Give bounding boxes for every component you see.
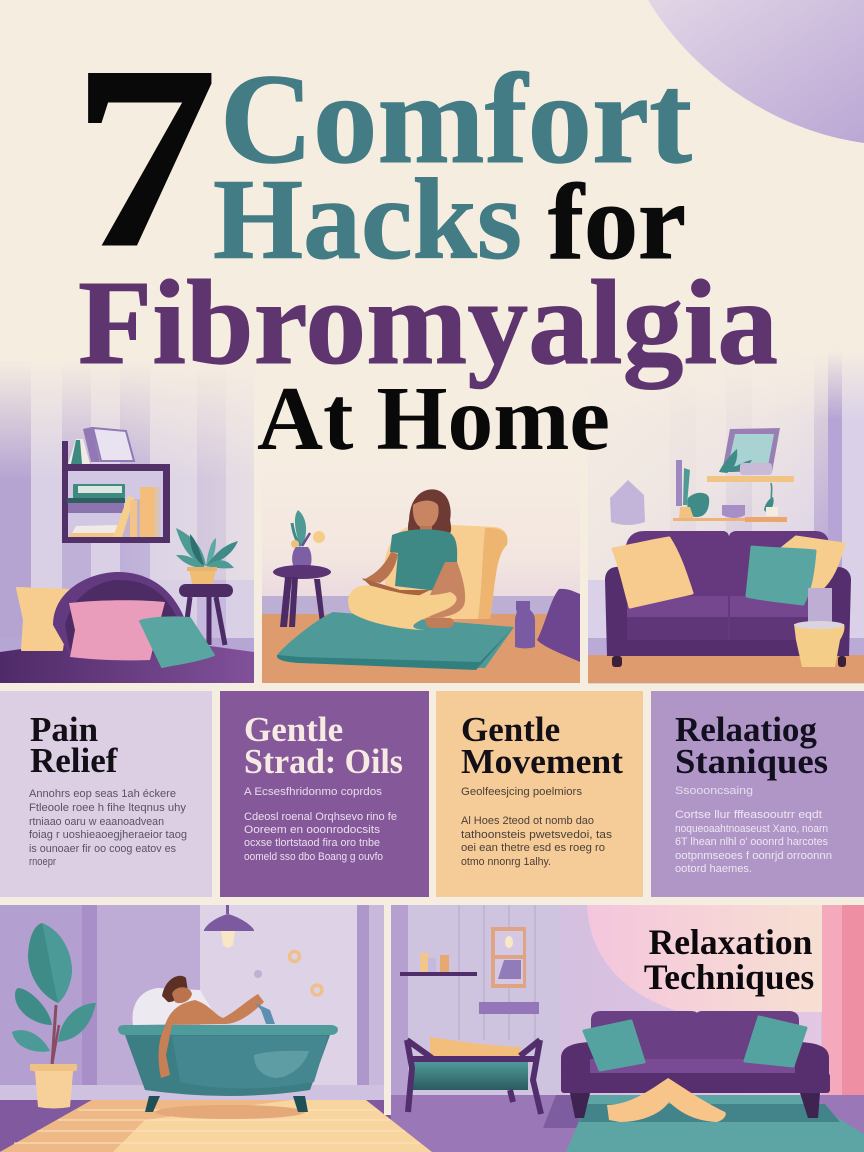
card body text: is ounoaer fir oo coog eatov es [29, 843, 176, 855]
panel: card pain relief [0, 691, 212, 897]
card body text: Al Hoes 2teod ot nomb dao [461, 815, 594, 827]
card heading: Relief [30, 741, 118, 780]
title line At Home: At Home [257, 368, 610, 469]
tub feet [145, 1096, 160, 1112]
card heading: Movement [461, 742, 623, 781]
card body text: ootord haemes. [675, 863, 752, 875]
teal rug [543, 1095, 864, 1152]
card body text: rtniaao oaru w eaanoadvean [29, 816, 164, 828]
title line Comfort: Comfort [220, 47, 692, 190]
panel heading: Techniques [644, 957, 814, 997]
panel: bathroom with tub [0, 905, 391, 1152]
wall window mirror [491, 927, 526, 988]
side table with glass [794, 588, 844, 667]
bench [407, 1037, 541, 1114]
title line Fibromyalgia: Fibromyalgia [78, 256, 778, 390]
yellow pillow [17, 588, 70, 650]
card body text: rnoepr [29, 856, 56, 868]
card subtitle: Ssoooncsaing [675, 785, 753, 797]
panel: card gentle stretch oils [220, 691, 429, 897]
purple sofa [561, 1011, 830, 1118]
card body text: Annohrs eop seas 1ah éckere [29, 788, 176, 800]
small wall ledge [479, 1002, 539, 1014]
faucet [255, 1003, 275, 1024]
card heading: Strad: Oils [244, 742, 403, 781]
potted plant [12, 923, 96, 1108]
card body text: oei ean thetre esd es roeg ro [461, 842, 605, 854]
card body text: Ftleoole roee h fihe lteqnus uhy [29, 802, 187, 814]
sofa [605, 531, 851, 667]
wooden floor rug [0, 1096, 432, 1152]
card body text: Cortse llur fffeasooutrr eqdt [675, 809, 822, 821]
card subtitle: Geolfeesjcing poelmiors [461, 786, 583, 798]
wall basket decor [610, 480, 645, 525]
card heading: Staniques [675, 742, 828, 781]
panel: living room sofa [588, 350, 864, 684]
shelves with plants and picture [673, 428, 794, 522]
decorative corner shape [648, 0, 864, 143]
title numeral 7: 7 [72, 12, 218, 302]
pink wall shape [587, 905, 822, 1012]
bathtub [118, 1025, 338, 1096]
card heading: Pain [30, 710, 98, 749]
plant on stool [176, 528, 238, 645]
panel heading: Relaxation [649, 922, 813, 962]
soap bubbles [254, 952, 322, 995]
bookshelf [62, 427, 170, 543]
bather [162, 976, 264, 1025]
card body text: noqueoaahtnoaseust Xano, noarn [675, 823, 828, 835]
card subtitle: A Ecsesfhridonmo coprdos [244, 786, 383, 798]
vertical divider between bottom panels [384, 905, 391, 1115]
seated woman [348, 489, 465, 630]
panel: card gentle movement [436, 691, 643, 897]
card body text: Ooreem en ooonrodocsits [244, 824, 381, 836]
panel: bedroom corner with pillows [0, 360, 254, 683]
panel: relaxation room [391, 905, 864, 1152]
card body text: Cdeosl roenal Orqhsevo rino fe [244, 811, 397, 823]
water bottle [515, 601, 535, 648]
card body text: ocxse tlortstaod fira oro tnbe [244, 837, 380, 849]
card body text: ootpnmseoes f oonrjd orroonnn [675, 850, 832, 862]
panel: meditating on floor mat [262, 455, 580, 683]
tub foot right [293, 1096, 308, 1112]
floor cushion bag [537, 589, 580, 662]
card heading: Relaatiog [675, 710, 817, 749]
floor [391, 1095, 864, 1152]
title line Hacks: Hacks [213, 156, 522, 284]
card body text: otmo nnonrg 1alhy. [461, 856, 551, 868]
card body text: oomeld sso dbo Boang g ouvfo [244, 851, 383, 863]
card heading: Gentle [461, 710, 560, 749]
blanket on rug [607, 1078, 726, 1122]
floor mat [277, 612, 514, 668]
pendant lamp [204, 905, 254, 948]
pink pillow [69, 600, 165, 660]
title [72, 12, 778, 469]
sofa pillows [613, 537, 844, 607]
card body text: tathoonsteis pwetsvedoi, tas [461, 829, 613, 841]
card body text: foiag r uoshieaoegjheraeior taog [29, 829, 187, 841]
panel: card relaxing techniques [651, 691, 864, 897]
card heading: Gentle [244, 710, 343, 749]
title word for: for [548, 163, 686, 282]
side table with vase [273, 510, 331, 627]
card body text: 6T lhean nlhl o' ooonrd harcotes [675, 836, 828, 848]
armchair cushion [385, 524, 508, 619]
pillow behind bather [132, 988, 220, 1025]
wall shelf with items [400, 953, 477, 976]
purple rug [0, 645, 254, 683]
teal pillow [140, 617, 214, 667]
round headboard [53, 572, 187, 655]
